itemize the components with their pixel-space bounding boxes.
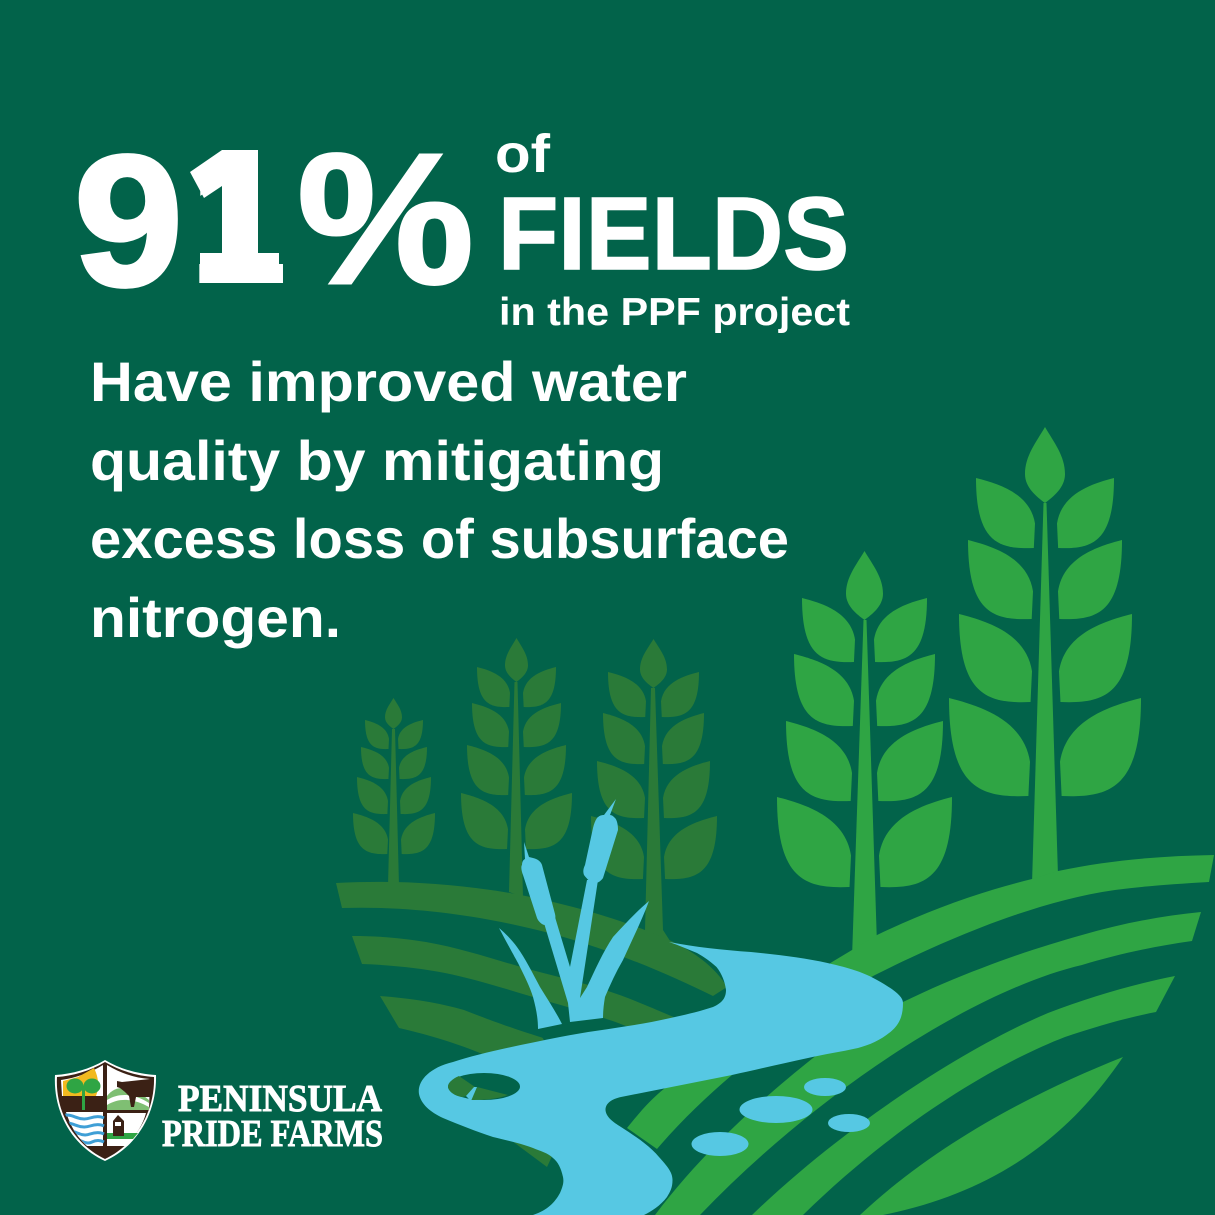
cattail plant	[499, 799, 649, 1029]
lily pad on river	[448, 1073, 520, 1101]
logo wordmark	[162, 1078, 383, 1155]
body statement	[90, 350, 789, 649]
right cattail head	[583, 799, 618, 883]
dark field row 1	[336, 882, 727, 996]
logo wordmark: PENINSULA	[178, 1078, 383, 1120]
quadrant: cow on hill	[107, 1065, 150, 1110]
icon: shield crest	[55, 1060, 156, 1161]
medium plant	[777, 551, 952, 958]
dark field row 3	[380, 996, 570, 1062]
left blade	[499, 928, 562, 1029]
bright field row 4	[860, 1057, 1123, 1215]
dark plant: right	[591, 639, 717, 950]
stems and right blade	[544, 880, 649, 1022]
body statement: quality by mitigating	[90, 429, 664, 492]
dark field fragment below river	[508, 1138, 555, 1167]
body statement: Have improved water	[90, 350, 687, 413]
large plant	[949, 427, 1141, 884]
headline: 91%: 1	[188, 116, 288, 323]
headline: 91%: %	[297, 116, 474, 323]
text: FIELDS: FIELDS	[498, 176, 849, 291]
dark field row 2	[352, 936, 690, 1032]
text: in the PPF project: in the PPF project	[499, 291, 850, 334]
headline: 91%: 9	[74, 118, 183, 325]
quadrant: sun and sprout	[61, 1065, 103, 1110]
bright field row 2	[655, 912, 1201, 1215]
bright field row 3	[752, 976, 1175, 1215]
quadrant: water waves	[62, 1112, 104, 1146]
body statement: nitrogen.	[90, 586, 341, 649]
illustration: background dark crops and field rows	[336, 638, 727, 1167]
headline: 91%	[74, 116, 474, 325]
river	[419, 942, 903, 1215]
quadrant: lighthouse	[107, 1113, 146, 1146]
logo wordmark: PRIDE FARMS	[162, 1113, 383, 1155]
gap under cattail base	[538, 1018, 612, 1042]
dark plant: middle	[461, 638, 572, 897]
lily pad ovals	[692, 1078, 870, 1156]
dark plant: small left	[353, 698, 435, 886]
illustration: foreground bright crops and field rows	[627, 427, 1214, 1215]
bright field row 1	[627, 855, 1214, 1149]
left cattail head	[521, 842, 555, 925]
logo: Peninsula Pride Farms	[55, 1060, 383, 1161]
text: of: of	[495, 124, 551, 184]
body statement: excess loss of subsurface	[90, 507, 789, 570]
